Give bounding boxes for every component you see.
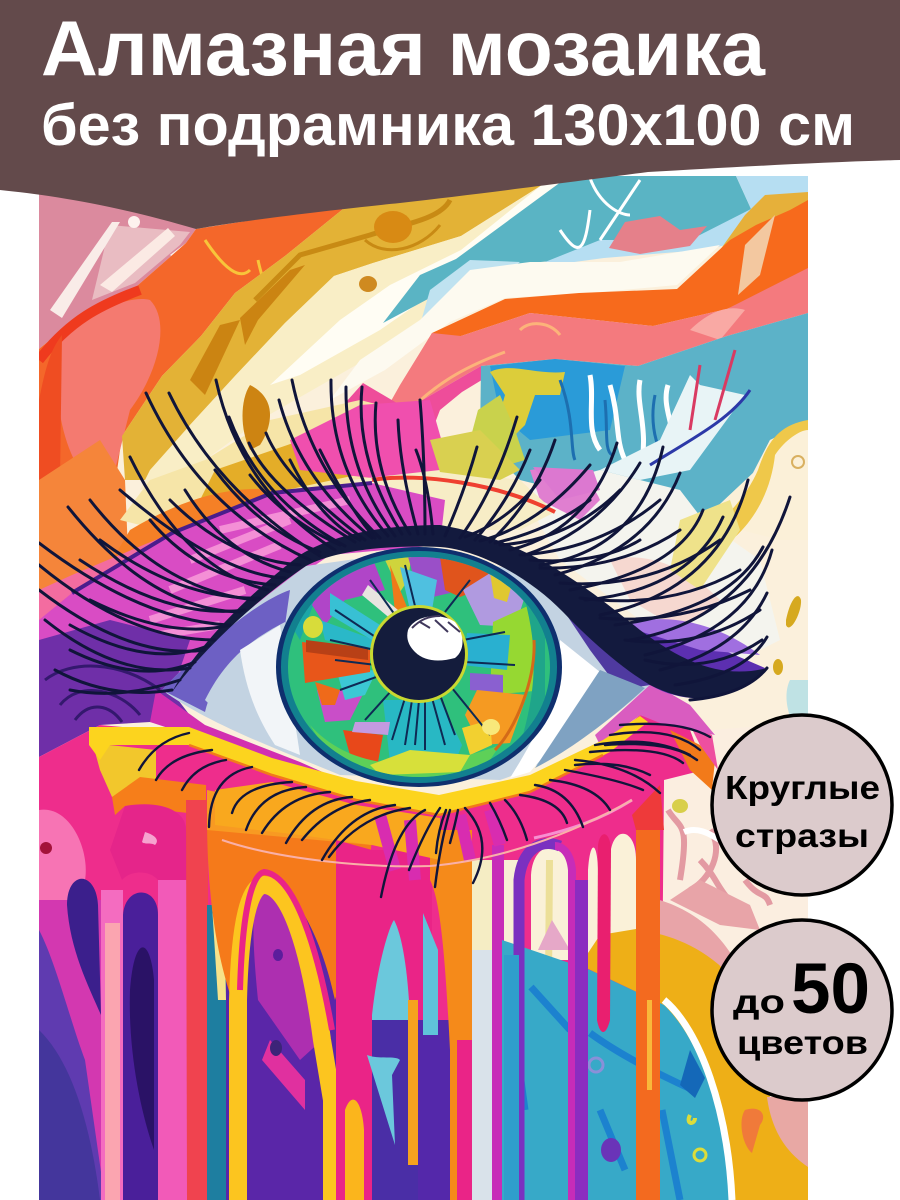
badge: up to 50 colours: 50 bbox=[791, 950, 870, 1029]
gold band bbox=[122, 180, 550, 480]
subtitle: без подрамника 130x100 см bbox=[41, 93, 855, 158]
cream gaps between drips bbox=[504, 860, 518, 944]
white band under teal bbox=[330, 245, 720, 400]
upper lashes bbox=[39, 380, 790, 700]
eye white shading bbox=[150, 590, 715, 782]
right cream swirls bbox=[664, 730, 773, 930]
upper lash base bbox=[172, 525, 767, 698]
salmon band bbox=[392, 268, 808, 402]
magenta streaks under the lid bbox=[380, 810, 500, 880]
eyelid bbox=[39, 483, 445, 673]
badge: up to 50 colours: до bbox=[733, 983, 785, 1020]
pale paint edge line bbox=[222, 800, 632, 866]
teal area bbox=[383, 176, 751, 323]
white outline of the blue field bbox=[664, 1000, 732, 1200]
gold field bbox=[580, 925, 808, 1200]
title: Алмазная мозаика bbox=[41, 4, 766, 92]
pink arc bbox=[660, 900, 730, 967]
abstract swirls: left of the eye bbox=[39, 385, 600, 640]
left paint colours bbox=[39, 728, 208, 1200]
dripping paint bbox=[207, 785, 808, 1200]
badge: round rhinestones bbox=[712, 715, 892, 895]
abstract swirls: right blue area bbox=[470, 313, 810, 722]
abstract swirls: top of painting bbox=[39, 176, 808, 490]
iris colour patches bbox=[295, 557, 545, 777]
painting: colourful eye with dripping paint bbox=[39, 176, 810, 1200]
header banner bbox=[0, 0, 900, 229]
coral figure on gold bbox=[741, 1109, 763, 1153]
pink band bbox=[344, 366, 481, 421]
pink corner bbox=[39, 194, 196, 349]
pupil bbox=[373, 608, 465, 700]
purple shadow beside the eye corner bbox=[39, 620, 205, 757]
lower lid yellow band bbox=[89, 716, 648, 815]
magenta corner of the eye bbox=[595, 683, 715, 745]
badge: round rhinestones: Круглые bbox=[725, 769, 880, 806]
pink corner at the lower right bbox=[767, 1097, 808, 1167]
lower paint field bbox=[39, 715, 695, 1020]
orange band bbox=[39, 209, 343, 468]
orange middle band bbox=[425, 200, 808, 344]
blue paint field bbox=[502, 940, 730, 1200]
orange drip mass bbox=[207, 815, 372, 1000]
purple under the right lashes bbox=[600, 620, 765, 698]
paint under the lower lid bbox=[215, 782, 440, 860]
cream and white band bbox=[140, 186, 541, 490]
purple and red drip columns bbox=[519, 844, 560, 1200]
badge: up to 50 colours bbox=[712, 920, 892, 1100]
eyelid crease bbox=[72, 483, 372, 593]
orange flame by the lid bbox=[670, 730, 715, 790]
whitish zone behind the right lashes bbox=[520, 470, 780, 660]
eyelid streaks bbox=[130, 500, 350, 640]
iris radial fibres bbox=[330, 565, 515, 750]
pupil highlight bbox=[407, 616, 462, 660]
badge: round rhinestones: стразы bbox=[735, 817, 869, 854]
iris bbox=[276, 545, 562, 790]
gold right stripe bbox=[721, 192, 808, 248]
eye white bbox=[162, 550, 650, 780]
cream right edge bbox=[720, 430, 808, 504]
lower lashes bbox=[139, 724, 710, 897]
badge: up to 50 colours: цветов bbox=[737, 1024, 868, 1061]
